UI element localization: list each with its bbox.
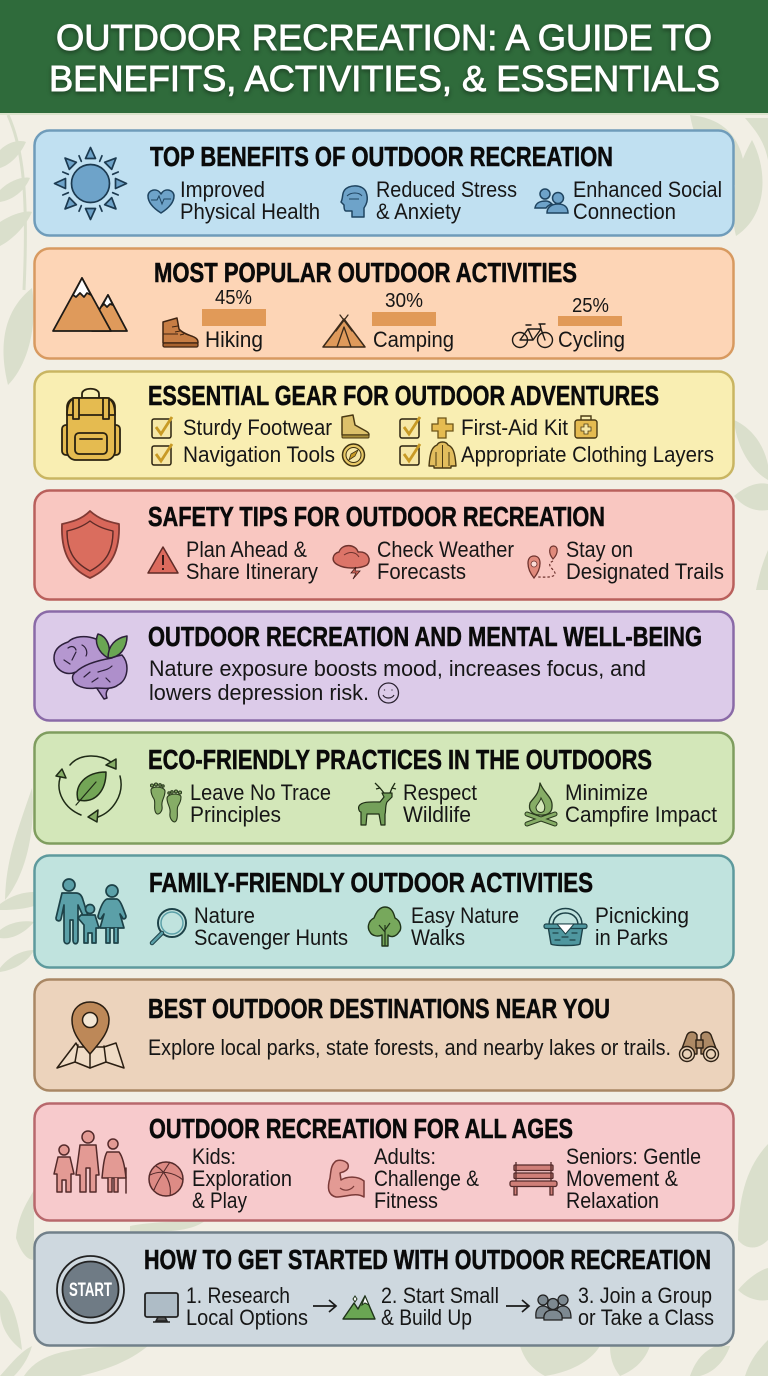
- item: scavenger hunts: Nature: [194, 903, 255, 928]
- panel: all ages: [34, 1104, 734, 1220]
- chart item: camping 30%: 30%: [385, 290, 423, 312]
- step 2: start small: 2. Start Small: [381, 1283, 499, 1308]
- icon: start button: START: [69, 1280, 112, 1301]
- item: sturdy footwear: Sturdy Footwear: [183, 415, 332, 440]
- panel: eco-friendly: [34, 732, 734, 844]
- icon: shield: [62, 511, 119, 578]
- icon: start button: [57, 1256, 124, 1323]
- item: check weather: Check Weather: [377, 537, 514, 562]
- item: physical health: [148, 177, 320, 224]
- icon: mountains: [53, 278, 127, 331]
- item: physical health: Improved: [180, 177, 265, 202]
- item: kids: Exploration: [192, 1166, 292, 1191]
- item: check weather: [333, 537, 514, 584]
- item: nature walks: Easy Nature: [411, 903, 519, 928]
- step 1: research: 1. Research: [186, 1283, 290, 1308]
- item: plan ahead: [148, 537, 318, 584]
- heading: FAMILY-FRIENDLY OUTDOOR ACTIVITIES: [149, 867, 593, 898]
- step 3: join a group: 3. Join a Group: [578, 1283, 712, 1308]
- item: clothing layers: Appropriate Clothing Layers: [461, 442, 714, 467]
- item: seniors: [510, 1144, 701, 1213]
- item: social connection: Enhanced Social: [573, 177, 722, 202]
- chart item: hiking 45%: Hiking: [205, 327, 263, 352]
- item: respect wildlife: Wildlife: [403, 802, 471, 827]
- item: check weather: Forecasts: [377, 559, 466, 584]
- item: leave no trace: Leave No Trace: [190, 780, 331, 805]
- step 2: start small: [343, 1283, 499, 1330]
- item: seniors: Relaxation: [566, 1188, 659, 1213]
- item: plan ahead: Plan Ahead &: [186, 537, 307, 562]
- item: scavenger hunts: [152, 903, 348, 950]
- item: reduced stress: Reduced Stress: [376, 177, 517, 202]
- item: nature walks: [368, 903, 519, 950]
- item: adults: Fitness: [374, 1188, 438, 1213]
- item: reduced stress: & Anxiety: [376, 199, 461, 224]
- item: picnicking: Picnicking: [595, 903, 689, 928]
- icon: sun: [54, 148, 126, 220]
- item: picnicking: [544, 903, 689, 950]
- item: picnicking: in Parks: [595, 925, 668, 950]
- panel: destinations: [34, 980, 734, 1090]
- panel: popular activities: [34, 248, 734, 358]
- item: reduced stress: [341, 177, 517, 224]
- chart item: hiking 45%: 45%: [215, 287, 252, 309]
- heading: OUTDOOR RECREATION FOR ALL AGES: [149, 1113, 573, 1144]
- item: social connection: [535, 177, 722, 224]
- heading: SAFETY TIPS FOR OUTDOOR RECREATION: [148, 501, 605, 532]
- item: first-aid kit: First-Aid Kit: [461, 415, 568, 440]
- step 2: start small: & Build Up: [381, 1305, 472, 1330]
- item: adults: [328, 1144, 479, 1213]
- item: leave no trace: Principles: [190, 802, 281, 827]
- icon: three generations: [54, 1131, 126, 1193]
- item: adults: Adults:: [374, 1144, 436, 1169]
- item: kids: [149, 1144, 292, 1213]
- heading: TOP BENEFITS OF OUTDOOR RECREATION: [150, 141, 613, 172]
- title banner: [0, 0, 768, 115]
- chart item: cycling 25%: 25%: [572, 295, 609, 317]
- item: leave no trace: [150, 780, 331, 827]
- item: social connection: Connection: [573, 199, 676, 224]
- step 1: research: [145, 1283, 308, 1330]
- heading: MOST POPULAR OUTDOOR ACTIVITIES: [154, 257, 577, 288]
- chart item: hiking 45%: [163, 287, 266, 352]
- body text with smile: [149, 656, 646, 705]
- arrow: [313, 1300, 336, 1312]
- item: kids: & Play: [192, 1188, 247, 1213]
- body text with binoculars: Explore local parks, state forests, and nearby lakes or trails.: [148, 1035, 671, 1060]
- title banner: OUTDOOR RECREATION: A GUIDE TO: [56, 17, 712, 58]
- step 3: join a group: [536, 1283, 714, 1330]
- item: nature walks: Walks: [411, 925, 465, 950]
- panel: mental well-being: [34, 612, 734, 720]
- item: respect wildlife: [359, 780, 477, 827]
- chart item: cycling 25%: Cycling: [558, 327, 625, 352]
- title banner: BENEFITS, ACTIVITIES, & ESSENTIALS: [49, 58, 720, 99]
- body text with smile: lowers depression risk.: [149, 680, 369, 705]
- item: kids: Kids:: [192, 1144, 236, 1169]
- panel: safety tips: [34, 490, 734, 600]
- item: seniors: Seniors: Gentle: [566, 1144, 701, 1169]
- heading: BEST OUTDOOR DESTINATIONS NEAR YOU: [148, 993, 610, 1024]
- item: campfire impact: [527, 780, 717, 827]
- step 3: join a group: or Take a Class: [578, 1305, 714, 1330]
- item: designated trails: [528, 537, 724, 584]
- arrow: [506, 1300, 529, 1312]
- item: physical health: Physical Health: [180, 199, 320, 224]
- chart item: camping 30%: [323, 290, 454, 352]
- item: seniors: Movement &: [566, 1166, 678, 1191]
- item: navigation tools: Navigation Tools: [183, 442, 335, 467]
- icon: brain with leaves: [54, 634, 127, 699]
- panel: essential gear: [34, 372, 734, 478]
- item: adults: Challenge &: [374, 1166, 479, 1191]
- step 1: research: Local Options: [186, 1305, 308, 1330]
- chart item: cycling 25%: [512, 295, 625, 352]
- panel: top benefits: [34, 130, 734, 236]
- icon: backpack: [62, 389, 120, 460]
- item: first-aid kit: [400, 415, 597, 440]
- body text with smile: Nature exposure boosts mood, increases focus, and: [149, 656, 646, 681]
- item: respect wildlife: Respect: [403, 780, 477, 805]
- item: designated trails: Designated Trails: [566, 559, 724, 584]
- item: campfire impact: Minimize: [565, 780, 648, 805]
- item: campfire impact: Campfire Impact: [565, 802, 717, 827]
- item: designated trails: Stay on: [566, 537, 633, 562]
- item: scavenger hunts: Scavenger Hunts: [194, 925, 348, 950]
- chart item: camping 30%: Camping: [373, 327, 454, 352]
- panel: family-friendly: [34, 856, 734, 968]
- icon: family: [56, 879, 126, 944]
- icon: leaf recycle loop: [56, 756, 121, 822]
- icon: map pin: [57, 1002, 124, 1068]
- panel: how to get started: [34, 1232, 734, 1346]
- item: plan ahead: Share Itinerary: [186, 559, 318, 584]
